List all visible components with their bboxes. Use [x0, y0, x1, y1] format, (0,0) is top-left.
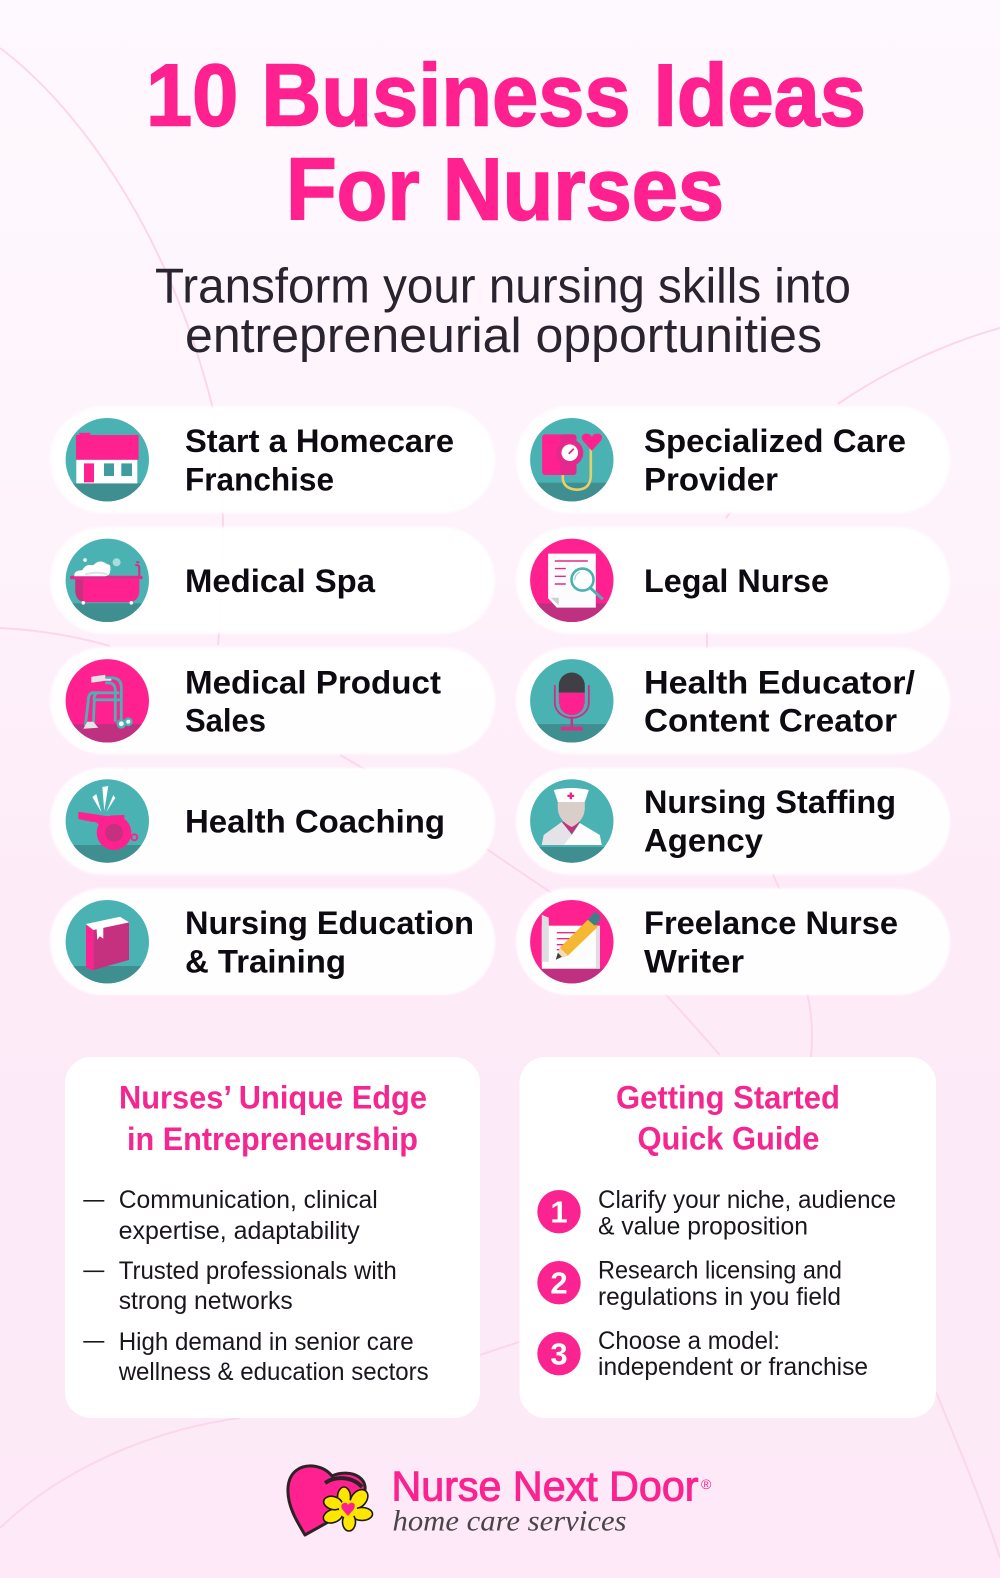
icon: bathtub	[65, 538, 149, 623]
panel: specialized care	[516, 406, 950, 513]
heading: Quick Guide	[638, 1121, 820, 1157]
step 3: 3	[550, 1336, 568, 1372]
label: Nursing Education	[185, 905, 474, 941]
logo: Nurse Next Door	[288, 1463, 712, 1538]
panel: nursing education	[50, 888, 495, 995]
label: Health Coaching	[185, 804, 445, 840]
label	[185, 905, 474, 980]
icon: paper and pencil	[530, 900, 614, 988]
step 1: & value proposition	[598, 1214, 808, 1240]
subtitle: entrepreneurial opportunities	[185, 309, 822, 363]
step 1	[537, 1187, 896, 1240]
panel: nurses' unique edge	[65, 1057, 480, 1418]
label: Content Creator	[644, 702, 897, 738]
label: Medical Spa	[185, 563, 375, 599]
bullet list: Trusted professionals with	[119, 1258, 397, 1285]
icon: microphone	[530, 659, 614, 744]
step 1: Clarify your niche, audience	[598, 1187, 896, 1214]
label: Specialized Care	[644, 423, 906, 459]
label: Franchise	[185, 462, 334, 498]
panel: homecare franchise	[50, 406, 495, 513]
step 3: independent or franchise	[598, 1354, 868, 1381]
icon: house	[65, 418, 149, 503]
label	[185, 664, 441, 738]
step 3	[537, 1328, 868, 1381]
icon: whistle	[65, 779, 149, 865]
step 2	[537, 1258, 842, 1311]
panel: medical spa	[50, 527, 495, 634]
label: Medical Product	[185, 664, 441, 700]
icon: document with magnifier	[530, 538, 614, 623]
label: Health Educator/	[644, 664, 915, 700]
label: Start a Homecare	[185, 423, 454, 459]
label	[644, 784, 896, 858]
title: For Nurses	[286, 140, 724, 238]
heading: in Entrepreneurship	[127, 1121, 418, 1157]
bullet list: expertise, adaptability	[119, 1218, 360, 1245]
label	[644, 905, 898, 980]
subtitle: Transform your nursing skills into	[155, 260, 851, 314]
heading	[616, 1079, 840, 1157]
panel: health educator	[516, 648, 950, 754]
step 1: 1	[550, 1194, 568, 1230]
heading: Nurses’ Unique Edge	[119, 1080, 427, 1116]
bullet list	[83, 1187, 429, 1386]
bullet list: wellness & education sectors	[118, 1359, 429, 1386]
icon: heart and flower	[288, 1466, 372, 1535]
label: Writer	[644, 944, 744, 980]
subtitle	[155, 260, 851, 363]
wordmark: home care services	[392, 1505, 626, 1538]
title: 10 Business Ideas	[146, 46, 866, 144]
label: Agency	[644, 822, 763, 858]
title	[146, 46, 866, 238]
label: Freelance Nurse	[644, 905, 898, 941]
label: Nursing Staffing	[644, 784, 896, 820]
label	[644, 664, 915, 738]
label: Legal Nurse	[644, 563, 829, 599]
bullet list: strong networks	[119, 1288, 293, 1315]
panel: nursing staffing	[516, 768, 950, 874]
label: Sales	[185, 702, 266, 738]
bullet list: High demand in senior care	[119, 1329, 414, 1356]
icon: nurse	[530, 779, 614, 867]
wordmark: ®	[701, 1476, 712, 1492]
step 3: Choose a model:	[598, 1328, 780, 1355]
step 2: regulations in you field	[598, 1284, 841, 1311]
label	[185, 423, 454, 498]
icon: book	[65, 900, 149, 986]
panel: health coaching	[50, 768, 495, 874]
step 2: 2	[550, 1266, 568, 1300]
panel: legal nurse	[516, 527, 950, 634]
label: Provider	[644, 462, 778, 498]
wordmark	[392, 1463, 712, 1538]
panel: medical product sales	[50, 648, 495, 754]
heading	[119, 1080, 427, 1157]
bullet list: Communication, clinical	[119, 1187, 378, 1214]
icon: blood pressure cuff	[530, 418, 614, 503]
panel: freelance writer	[516, 888, 950, 995]
icon: walker	[65, 659, 149, 744]
panel: getting started quick guide	[520, 1057, 936, 1418]
heading: Getting Started	[616, 1079, 840, 1115]
step 2: Research licensing and	[598, 1258, 842, 1284]
label	[644, 423, 906, 498]
wordmark: Nurse Next Door	[392, 1463, 699, 1510]
label: & Training	[185, 944, 346, 980]
